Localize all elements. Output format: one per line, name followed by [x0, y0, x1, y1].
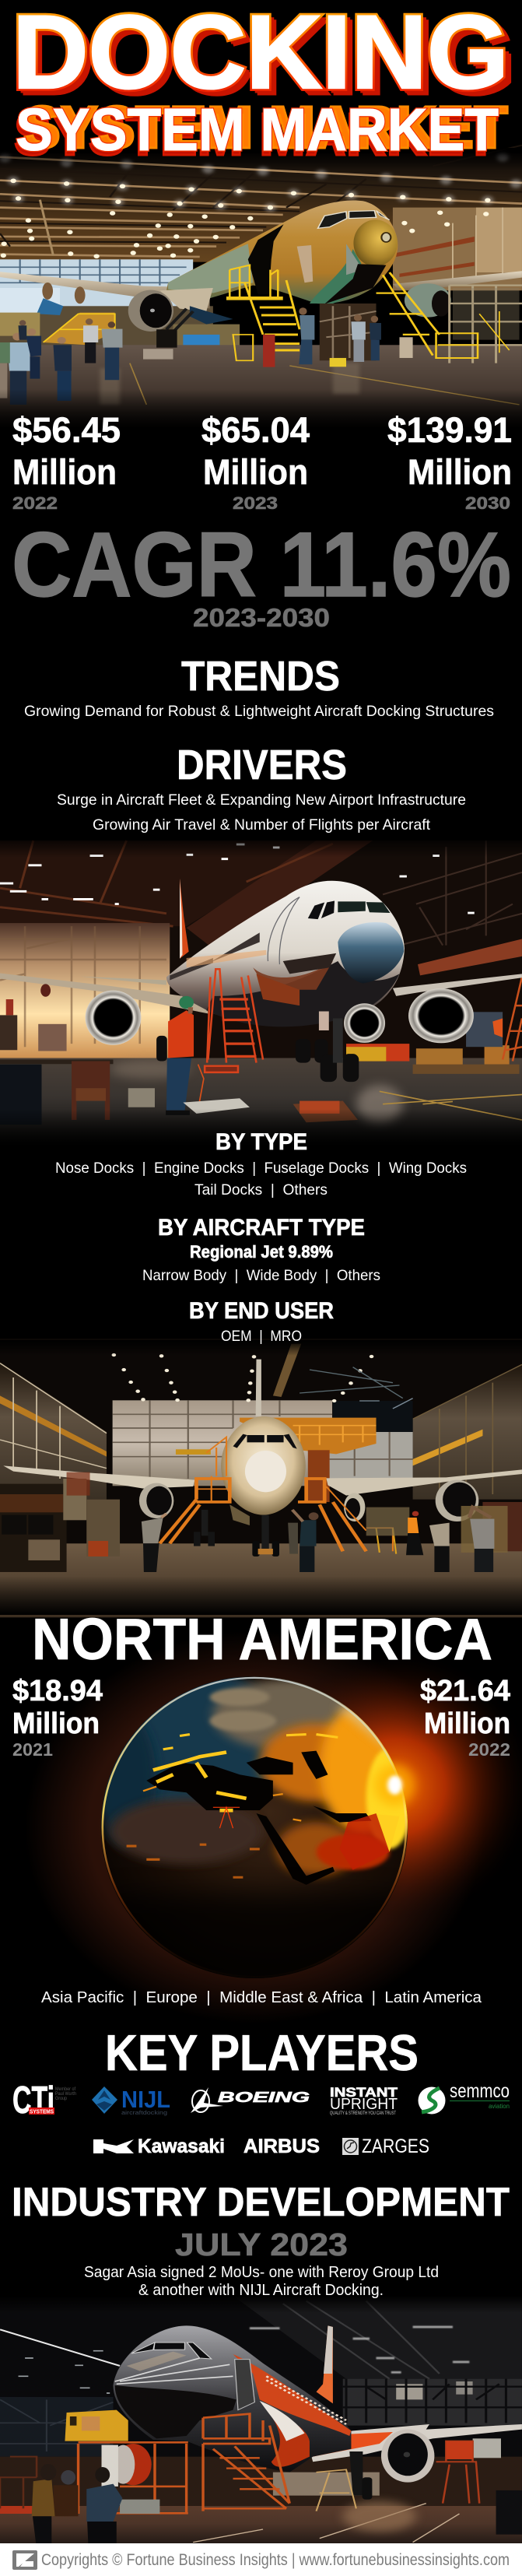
fuselage [166, 200, 398, 304]
title: SYSTEM MARKET [16, 97, 499, 163]
North America 2021 value: $18.94 [12, 1675, 103, 1707]
logo: Semmco [419, 2080, 510, 2114]
logo: Airbus: AIRBUS [243, 2136, 320, 2157]
tail fin [180, 879, 189, 959]
orange engine behind [115, 2444, 152, 2485]
industry development [12, 2180, 510, 2299]
logo: Boeing: BOEING [218, 2090, 310, 2105]
logo: Instant Upright: INSTANT [330, 2085, 398, 2100]
windows band [343, 2379, 522, 2426]
North America 2022 value: 2022 [468, 1739, 510, 1760]
background equipment [0, 977, 522, 1074]
logo: Instant Upright: UPRIGHT [330, 2096, 398, 2113]
logo: NIJL [92, 2086, 170, 2116]
logo: Zarges: ZARGES [362, 2136, 429, 2157]
logo: Kawasaki [93, 2136, 225, 2157]
drivers: Growing Air Travel & Number of Flights per Aircraft [93, 816, 431, 834]
logo: Semmco: semmco [450, 2080, 510, 2102]
industry development: & another with NIJL Aircraft Docking. [138, 2282, 384, 2299]
right wing and engine [307, 2424, 522, 2500]
logo: Zarges [342, 2136, 429, 2157]
wings [0, 974, 208, 1013]
yellow cab [65, 2410, 128, 2441]
floor [0, 2504, 522, 2543]
logo: CTI Systems: Group [55, 2097, 68, 2101]
trends [24, 653, 494, 720]
left wing [0, 272, 210, 309]
North America 2021 value [12, 1675, 103, 1760]
logo: CTI Systems: Paul Wurth [55, 2092, 76, 2097]
nose cone [353, 219, 398, 266]
stat 2023: $65.04 [201, 410, 310, 450]
drivers: DRIVERS [177, 742, 347, 788]
segment by end user: OEM | MRO [221, 1328, 302, 1345]
logo: CTI Systems: SYSTEMS [30, 2109, 54, 2115]
trends: TRENDS [181, 653, 340, 700]
segment by aircraft type: Narrow Body | Wide Body | Others [142, 1267, 380, 1284]
title [12, 0, 516, 168]
key players heading: KEY PLAYERS [105, 2024, 419, 2081]
right engine and wing [393, 271, 522, 318]
tail fin [317, 2325, 333, 2403]
left engine [128, 288, 233, 348]
stat 2022 [12, 410, 121, 513]
right equipment [366, 1502, 522, 1553]
stat 2030: $139.91 [387, 410, 512, 450]
hero photo: aircraft in hangar with yellow docks [0, 146, 522, 428]
left equipment rack [0, 1472, 120, 1572]
workers [32, 2464, 122, 2543]
logo: NIJL: aircraftdocking [121, 2111, 167, 2116]
workers [0, 307, 381, 405]
workers [142, 1507, 494, 1572]
icon: Fortune Business Insights logo [12, 2550, 37, 2570]
segment by type: BY TYPE [215, 1129, 307, 1155]
logo: CTI Systems: Member of [55, 2087, 75, 2092]
nose gear [156, 1018, 359, 1082]
logo: Semmco: aviation [489, 2103, 510, 2110]
segment by type [55, 1129, 467, 1199]
orange stairs [159, 1437, 396, 1554]
nose gear [194, 1510, 279, 1556]
fuselage [113, 2325, 351, 2472]
photo: front view of airliner with orange docks [0, 1339, 522, 1617]
logo: Kawasaki: Kawasaki [138, 2136, 225, 2157]
title: DOCKING [18, 0, 516, 116]
worker in red [166, 996, 250, 1115]
red service stairs [205, 969, 263, 1072]
floor [0, 1543, 522, 1617]
North America 2021 value: Million [12, 1707, 100, 1740]
industry development: JULY 2023 [175, 2227, 348, 2262]
drivers [57, 742, 466, 834]
logo: Instant Upright [330, 2085, 398, 2116]
stat 2030 [387, 410, 512, 513]
orange scaffold [79, 2414, 479, 2514]
ceiling lights [114, 1344, 403, 1416]
segment by aircraft type: Regional Jet 9.89% [190, 1242, 333, 1262]
Mediterranean and seas [146, 1751, 373, 1885]
drivers: Surge in Aircraft Fleet & Expanding New Airport Infrastructure [57, 791, 466, 809]
industry development: Sagar Asia signed 2 MoUs- one with Reroy Group Ltd [84, 2264, 439, 2281]
left workstation [0, 2457, 79, 2516]
logo: Instant Upright: QUALITY & STRENGTH YOU CAN TRUST [330, 2111, 396, 2116]
key player logos [12, 2079, 510, 2157]
yellow stairs [44, 265, 510, 360]
stat 2030: 2030 [465, 493, 510, 513]
North America heading: NORTH AMERICA [32, 1606, 492, 1672]
hangar floor [0, 1058, 522, 1146]
logo: CTI Systems: CTi [12, 2079, 54, 2122]
photo: white airliner with worker [0, 834, 522, 1146]
fuselage [166, 881, 405, 1027]
trends: Growing Demand for Robust & Lightweight Aircraft Docking Structures [24, 703, 494, 720]
North America 2022 value: $21.64 [420, 1675, 510, 1707]
back wall [113, 1400, 332, 1486]
CAGR headline: 2023-2030 [193, 603, 330, 632]
segment by end user: BY END USER [189, 1298, 334, 1324]
logo: NIJL: NIJL [121, 2086, 170, 2113]
coastline lights [143, 1735, 338, 1828]
North America 2022 value [420, 1675, 510, 1760]
right wall [413, 1364, 522, 1500]
globe illustration with sunrise [25, 1630, 522, 2024]
industry development: INDUSTRY DEVELOPMENT [12, 2180, 510, 2225]
segment by aircraft type: BY AIRCRAFT TYPE [158, 1215, 365, 1241]
segment by type: Tail Docks | Others [194, 1181, 328, 1199]
market size stats [12, 410, 512, 513]
far right engine [408, 988, 474, 1043]
title: DOCKING [16, 0, 513, 114]
fuselage front [221, 1416, 306, 1525]
stat 2030: Million [408, 452, 512, 492]
stat 2022: Million [12, 452, 117, 492]
left wall [0, 1362, 107, 1500]
title: SYSTEM MARKET [16, 97, 499, 163]
ceiling lights [3, 157, 516, 256]
stat 2022: $56.45 [12, 410, 121, 450]
segment by type: Nose Docks | Engine Docks | Fuselage Docks | Wing Docks [55, 1160, 467, 1177]
photo: orange and chrome airliner in dark hangar [0, 2296, 522, 2543]
right engine [344, 1003, 385, 1043]
wings [3, 1465, 194, 1489]
stat 2022: 2022 [12, 493, 58, 513]
upper orange platform [176, 1418, 377, 1502]
stat 2023: Million [203, 452, 308, 492]
segment by aircraft type [142, 1215, 380, 1284]
stat 2023 [201, 410, 310, 513]
stat 2023: 2023 [233, 493, 278, 513]
title: SYSTEM MARKET [14, 101, 498, 168]
North America 2021 value: 2021 [12, 1739, 53, 1760]
segment by end user [189, 1298, 334, 1345]
logo: Boeing [191, 2087, 310, 2113]
left engine [86, 991, 141, 1045]
North America 2022 value: Million [424, 1707, 510, 1740]
other regions: Asia Pacific | Europe | Middle East & Africa | Latin America [41, 1989, 482, 2006]
footer copyright bar [0, 2543, 522, 2576]
workbench [0, 1060, 358, 1125]
right scaffold [450, 286, 522, 363]
engines [139, 1483, 173, 1518]
